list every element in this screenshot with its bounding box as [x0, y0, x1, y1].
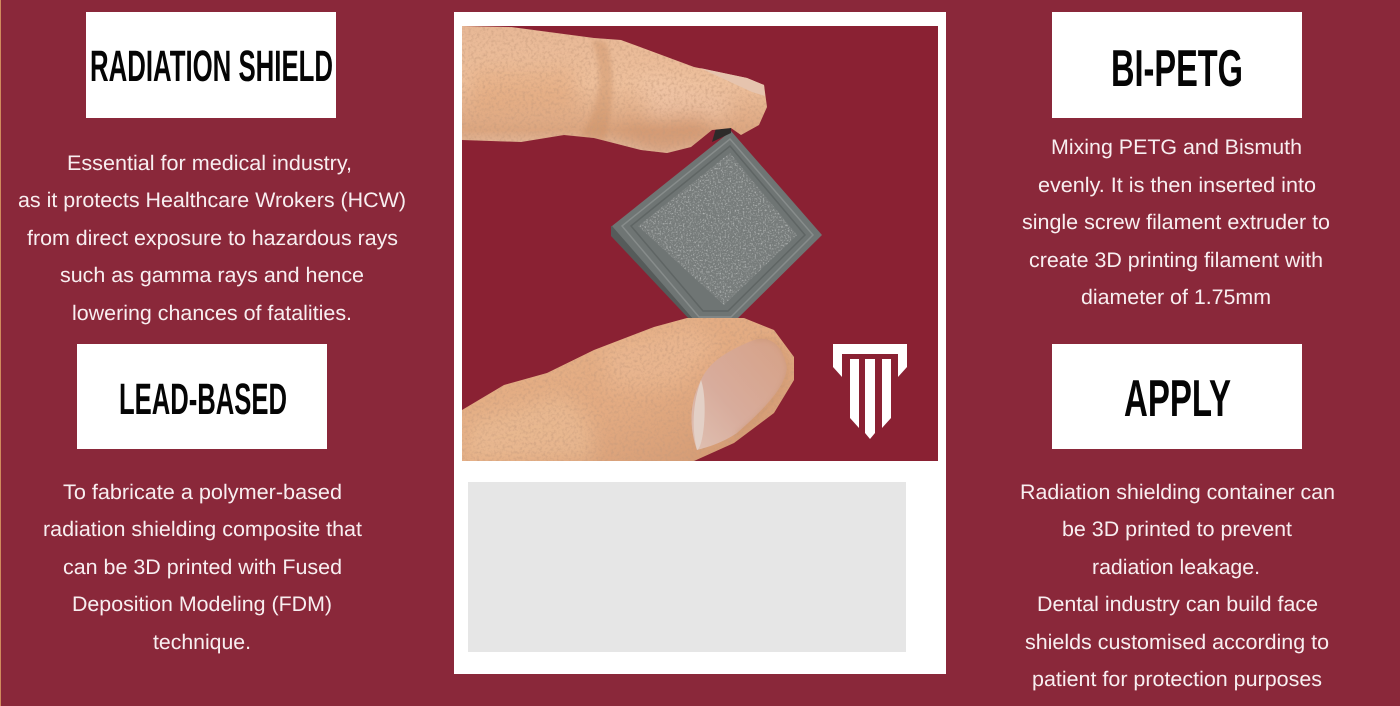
text block: bi-petg description: diameter of 1.75mm: [1081, 286, 1271, 309]
text block: lead-based description: can be 3D printed with Fused: [63, 556, 342, 579]
heading box: apply: [1052, 344, 1302, 449]
heading box: bi-petg: BI-PETG: [1111, 40, 1243, 98]
text block: apply description: shields customised according to: [1025, 631, 1329, 654]
panel: bi-petg: [1022, 12, 1330, 309]
panel: radiation shield: [18, 12, 406, 325]
text block: apply description: Dental industry can build face: [1037, 593, 1318, 616]
text block: apply description: radiation leakage.: [1092, 556, 1260, 579]
heading box: bi-petg: [1052, 12, 1302, 118]
text block: lead-based description: radiation shielding composite that: [43, 518, 362, 541]
text block: bi-petg description: Mixing PETG and Bismuth: [1051, 136, 1302, 159]
heading box: radiation shield: RADIATION SHIELD: [90, 42, 333, 91]
panel: center photo card: [454, 12, 946, 674]
text block: apply description: Radiation shielding container can: [1020, 481, 1335, 504]
text block: bi-petg description: evenly. It is then inserted into: [1038, 174, 1316, 197]
text block: radiation shield description: as it protects Healthcare Wrokers (HCW): [18, 189, 406, 212]
white card: [454, 12, 946, 674]
icon: pillar logo: [833, 344, 907, 439]
text block: apply description: patient for protection purposes: [1032, 668, 1322, 691]
text block: apply description: be 3D printed to prevent: [1062, 518, 1292, 541]
text block: radiation shield description: such as gamma rays and hence: [60, 264, 364, 287]
panel: apply: [1020, 344, 1335, 691]
panel: lead-based: [43, 344, 362, 654]
grey placeholder box: [468, 482, 906, 652]
text block: lead-based description: [43, 481, 362, 654]
photo: fingers holding printed square: [460, 26, 938, 461]
text block: lead-based description: technique.: [153, 631, 251, 654]
heading box: apply: APPLY: [1124, 370, 1231, 428]
text block: radiation shield description: Essential for medical industry,: [67, 152, 352, 175]
photo detail: upper finger: [462, 26, 768, 160]
text block: radiation shield description: [18, 152, 406, 325]
text block: bi-petg description: create 3D printing filament with: [1029, 249, 1323, 272]
text block: radiation shield description: from direct exposure to hazardous rays: [27, 227, 398, 250]
text block: apply description: [1020, 481, 1335, 691]
heading box: lead-based: LEAD-BASED: [119, 375, 287, 424]
text block: lead-based description: Deposition Modeling (FDM): [72, 593, 332, 616]
text block: radiation shield description: lowering chances of fatalities.: [72, 302, 352, 325]
heading box: lead-based: [77, 344, 327, 449]
text block: lead-based description: To fabricate a polymer-based: [63, 481, 342, 504]
text block: bi-petg description: single screw filament extruder to: [1022, 211, 1330, 234]
photo detail: printed bismuth square: [611, 126, 822, 322]
text block: bi-petg description: [1022, 136, 1330, 309]
photo detail: thumb: [460, 318, 795, 461]
heading box: radiation shield: [86, 12, 336, 118]
